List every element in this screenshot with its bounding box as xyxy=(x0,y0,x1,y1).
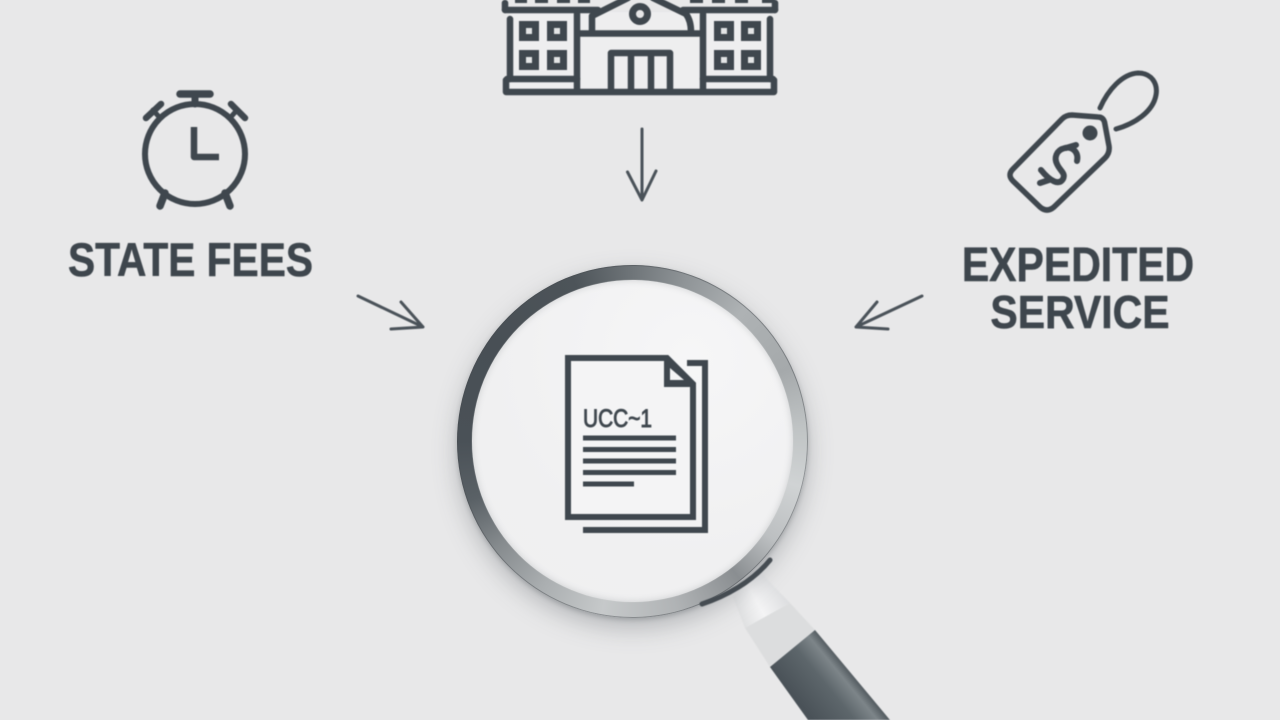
icon: alarm clock xyxy=(145,94,245,206)
back page xyxy=(583,363,705,530)
magnifier lens xyxy=(457,265,808,618)
arrow: expedited service to document xyxy=(856,296,922,329)
document: UCC-1 form xyxy=(564,354,709,534)
arrow: state fees to document xyxy=(358,296,423,329)
magnifier clamp xyxy=(699,556,774,608)
magnifier handle xyxy=(733,572,890,720)
heading: state fees: STATE FEES xyxy=(68,234,313,287)
form title: UCC~1 xyxy=(583,406,652,433)
glass xyxy=(472,280,793,602)
folded corner xyxy=(664,356,696,387)
icon: price tag xyxy=(1010,73,1156,210)
heading: expedited service: SERVICE xyxy=(990,287,1170,339)
front page xyxy=(568,358,693,517)
icon: government building xyxy=(505,0,775,92)
text lines xyxy=(583,436,676,486)
arrow: building to document xyxy=(628,129,656,200)
heading: expedited service: EXPEDITED xyxy=(962,239,1194,292)
heading: expedited service xyxy=(962,239,1194,339)
